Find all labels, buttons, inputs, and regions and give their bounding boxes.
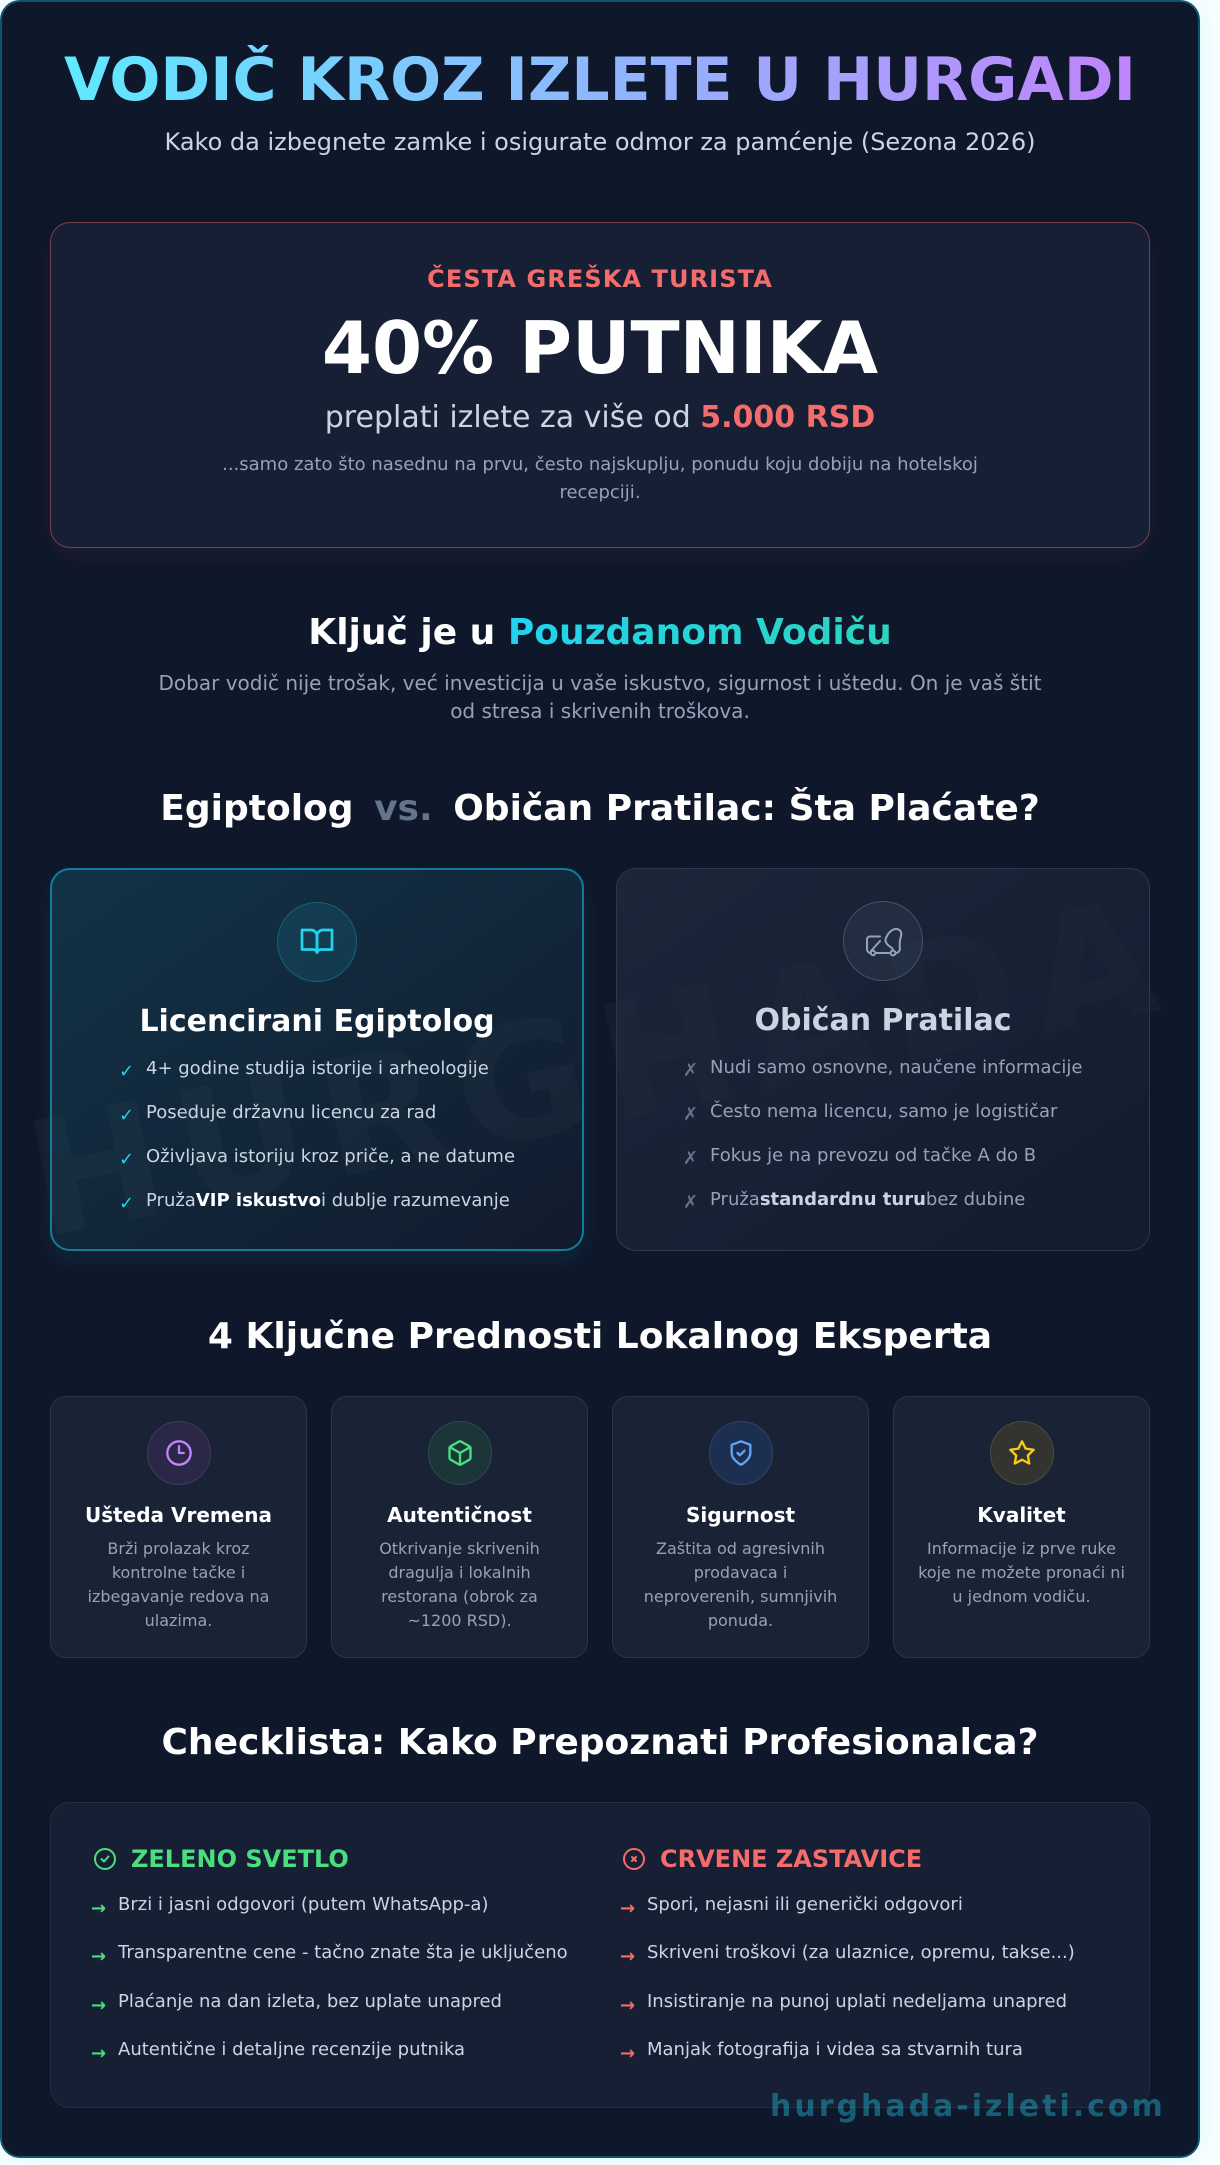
card text: dragulja i lokalnih <box>388 1563 531 1582</box>
card text <box>918 1539 1125 1606</box>
card text <box>644 1539 837 1630</box>
drawback list <box>683 1057 1082 1213</box>
icon: x circle <box>623 1848 645 1870</box>
overpay text: preplati izlete za više od 5.000 RSD <box>325 400 875 435</box>
heading: four advantages: 4 Ključne Prednosti Lokalnog Eksperta <box>208 1316 992 1357</box>
item: Oživljava istoriju kroz priče, a ne datume <box>146 1146 515 1167</box>
benefit list: ✓ <box>119 1061 134 1082</box>
heading: checklist: Checklista: Kako Prepoznati Profesionalca? <box>162 1722 1038 1763</box>
card heading: Običan Pratilac <box>754 1003 1012 1038</box>
feature card: quality <box>893 1396 1150 1658</box>
card title: Kvalitet <box>977 1503 1066 1527</box>
column: green light: → <box>91 1995 106 2016</box>
benefit list <box>119 1058 515 1214</box>
card text <box>88 1539 269 1630</box>
column: red flags <box>620 1845 1075 2064</box>
column heading: ZELENO SVETLO <box>131 1845 349 1873</box>
icon: check circle <box>94 1848 116 1870</box>
item: Autentične i detaljne recenzije putnika <box>118 2039 465 2060</box>
column: red flags: → <box>620 1946 635 1967</box>
column: green light: → <box>91 1946 106 1967</box>
alert note <box>222 454 978 503</box>
card text: neproverenih, sumnjivih <box>644 1587 837 1606</box>
icon: open book <box>277 902 357 982</box>
card text: prodavaca i <box>694 1563 787 1582</box>
card text: ~1200 RSD). <box>407 1611 512 1630</box>
item: Insistiranje na punoj uplati nedeljama unapred <box>647 1991 1067 2012</box>
benefit list: ✓ <box>119 1193 134 1214</box>
column: green light: → <box>91 2043 106 2064</box>
drawback list: ✗ <box>683 1148 698 1169</box>
item: Spori, nejasni ili generički odgovori <box>647 1894 963 1915</box>
card title: Ušteda Vremena <box>85 1503 272 1527</box>
footer website watermark: hurghada-izleti.com <box>770 2089 1166 2124</box>
item: Pružastandardnu turubez dubine <box>710 1189 1025 1210</box>
big statistic: 40% PUTNIKA <box>322 306 878 390</box>
item: 4+ godine studija istorije i arheologije <box>146 1058 489 1079</box>
card text: restorana (obrok za <box>381 1587 538 1606</box>
column: green light: → <box>91 1898 106 1919</box>
icon: transport <box>843 901 923 981</box>
icon: clock <box>146 1421 210 1485</box>
feature card: safety <box>612 1396 869 1658</box>
feature card: authenticity <box>331 1396 588 1658</box>
icon: shield <box>708 1421 772 1485</box>
item: Plaćanje na dan izleta, bez uplate unapred <box>118 1991 502 2012</box>
item: Transparentne cene - tačno znate šta je uključeno <box>118 1942 568 1963</box>
card text: ponuda. <box>708 1611 773 1630</box>
card text: Otkrivanje skrivenih <box>379 1539 540 1558</box>
panel: licensed egyptologist <box>50 868 584 1251</box>
item: Nudi samo osnovne, naučene informacije <box>710 1057 1082 1078</box>
card text: izbegavanje redova na <box>88 1587 269 1606</box>
card text: ulazima. <box>145 1611 212 1630</box>
icon: star <box>990 1421 1054 1485</box>
drawback list: ✗ <box>683 1192 698 1213</box>
alert note: recepciji. <box>559 482 641 503</box>
subtitle: Kako da izbegnete zamke i osigurate odmor za pamćenje (Sezona 2026) <box>165 128 1035 156</box>
background watermark HURGHADA: HURGHADA <box>13 860 1187 1275</box>
item: Manjak fotografija i videa sa stvarnih tura <box>647 2039 1023 2060</box>
item: Često nema licencu, samo je logističar <box>710 1101 1057 1122</box>
intro text: Dobar vodič nije trošak, već investicija u vaše iskustvo, sigurnost i uštedu. On je vaš štit <box>159 671 1041 695</box>
card text: koje ne možete pronaći ni <box>918 1563 1125 1582</box>
heading: key is a reliable guide: Ključ je u Pouzdanom Vodiču <box>308 612 892 653</box>
panel: ordinary companion <box>616 868 1150 1251</box>
alert label: ČESTA GREŠKA TURISTA <box>427 265 773 293</box>
intro text: od stresa i skrivenih troškova. <box>450 699 750 723</box>
column: red flags: → <box>620 2043 635 2064</box>
column heading: CRVENE ZASTAVICE <box>660 1845 922 1873</box>
item: Fokus je na prevozu od tačke A do B <box>710 1145 1036 1166</box>
benefit list: ✓ <box>119 1105 134 1126</box>
card text: Informacije iz prve ruke <box>927 1539 1116 1558</box>
item: Brzi i jasni odgovori (putem WhatsApp-a) <box>118 1894 488 1915</box>
item: Skriveni troškovi (za ulaznice, opremu, takse...) <box>647 1942 1075 1963</box>
card title: Autentičnost <box>387 1503 532 1527</box>
panel: common tourist mistake <box>50 222 1150 548</box>
intro text <box>159 671 1041 723</box>
item: PružaVIP iskustvoi dublje razumevanje <box>146 1190 510 1211</box>
card text: Zaštita od agresivnih <box>656 1539 825 1558</box>
card text <box>379 1539 540 1630</box>
card text: kontrolne tačke i <box>112 1563 245 1582</box>
card title: Sigurnost <box>686 1503 795 1527</box>
heading: comparison: Egiptolog vs. Običan Pratilac: Šta Plaćate? <box>160 788 1040 829</box>
benefit list: ✓ <box>119 1149 134 1170</box>
drawback list: ✗ <box>683 1104 698 1125</box>
alert note: ...samo zato što nasednu na prvu, često najskuplju, ponudu koju dobiju na hotelskoj <box>222 454 978 475</box>
card text: u jednom vodiču. <box>952 1587 1091 1606</box>
feature card: saving time <box>50 1396 307 1658</box>
title: VODIČ KROZ IZLETE U HURGADI <box>64 45 1136 115</box>
card heading: Licencirani Egiptolog <box>139 1004 495 1039</box>
column: green light <box>91 1845 568 2064</box>
item: Poseduje državnu licencu za rad <box>146 1102 436 1123</box>
panel: checklist <box>50 1802 1150 2108</box>
icon: box <box>428 1421 492 1485</box>
column: red flags: → <box>620 1995 635 2016</box>
card text: Brži prolazak kroz <box>107 1539 250 1558</box>
column: red flags: → <box>620 1898 635 1919</box>
drawback list: ✗ <box>683 1060 698 1081</box>
